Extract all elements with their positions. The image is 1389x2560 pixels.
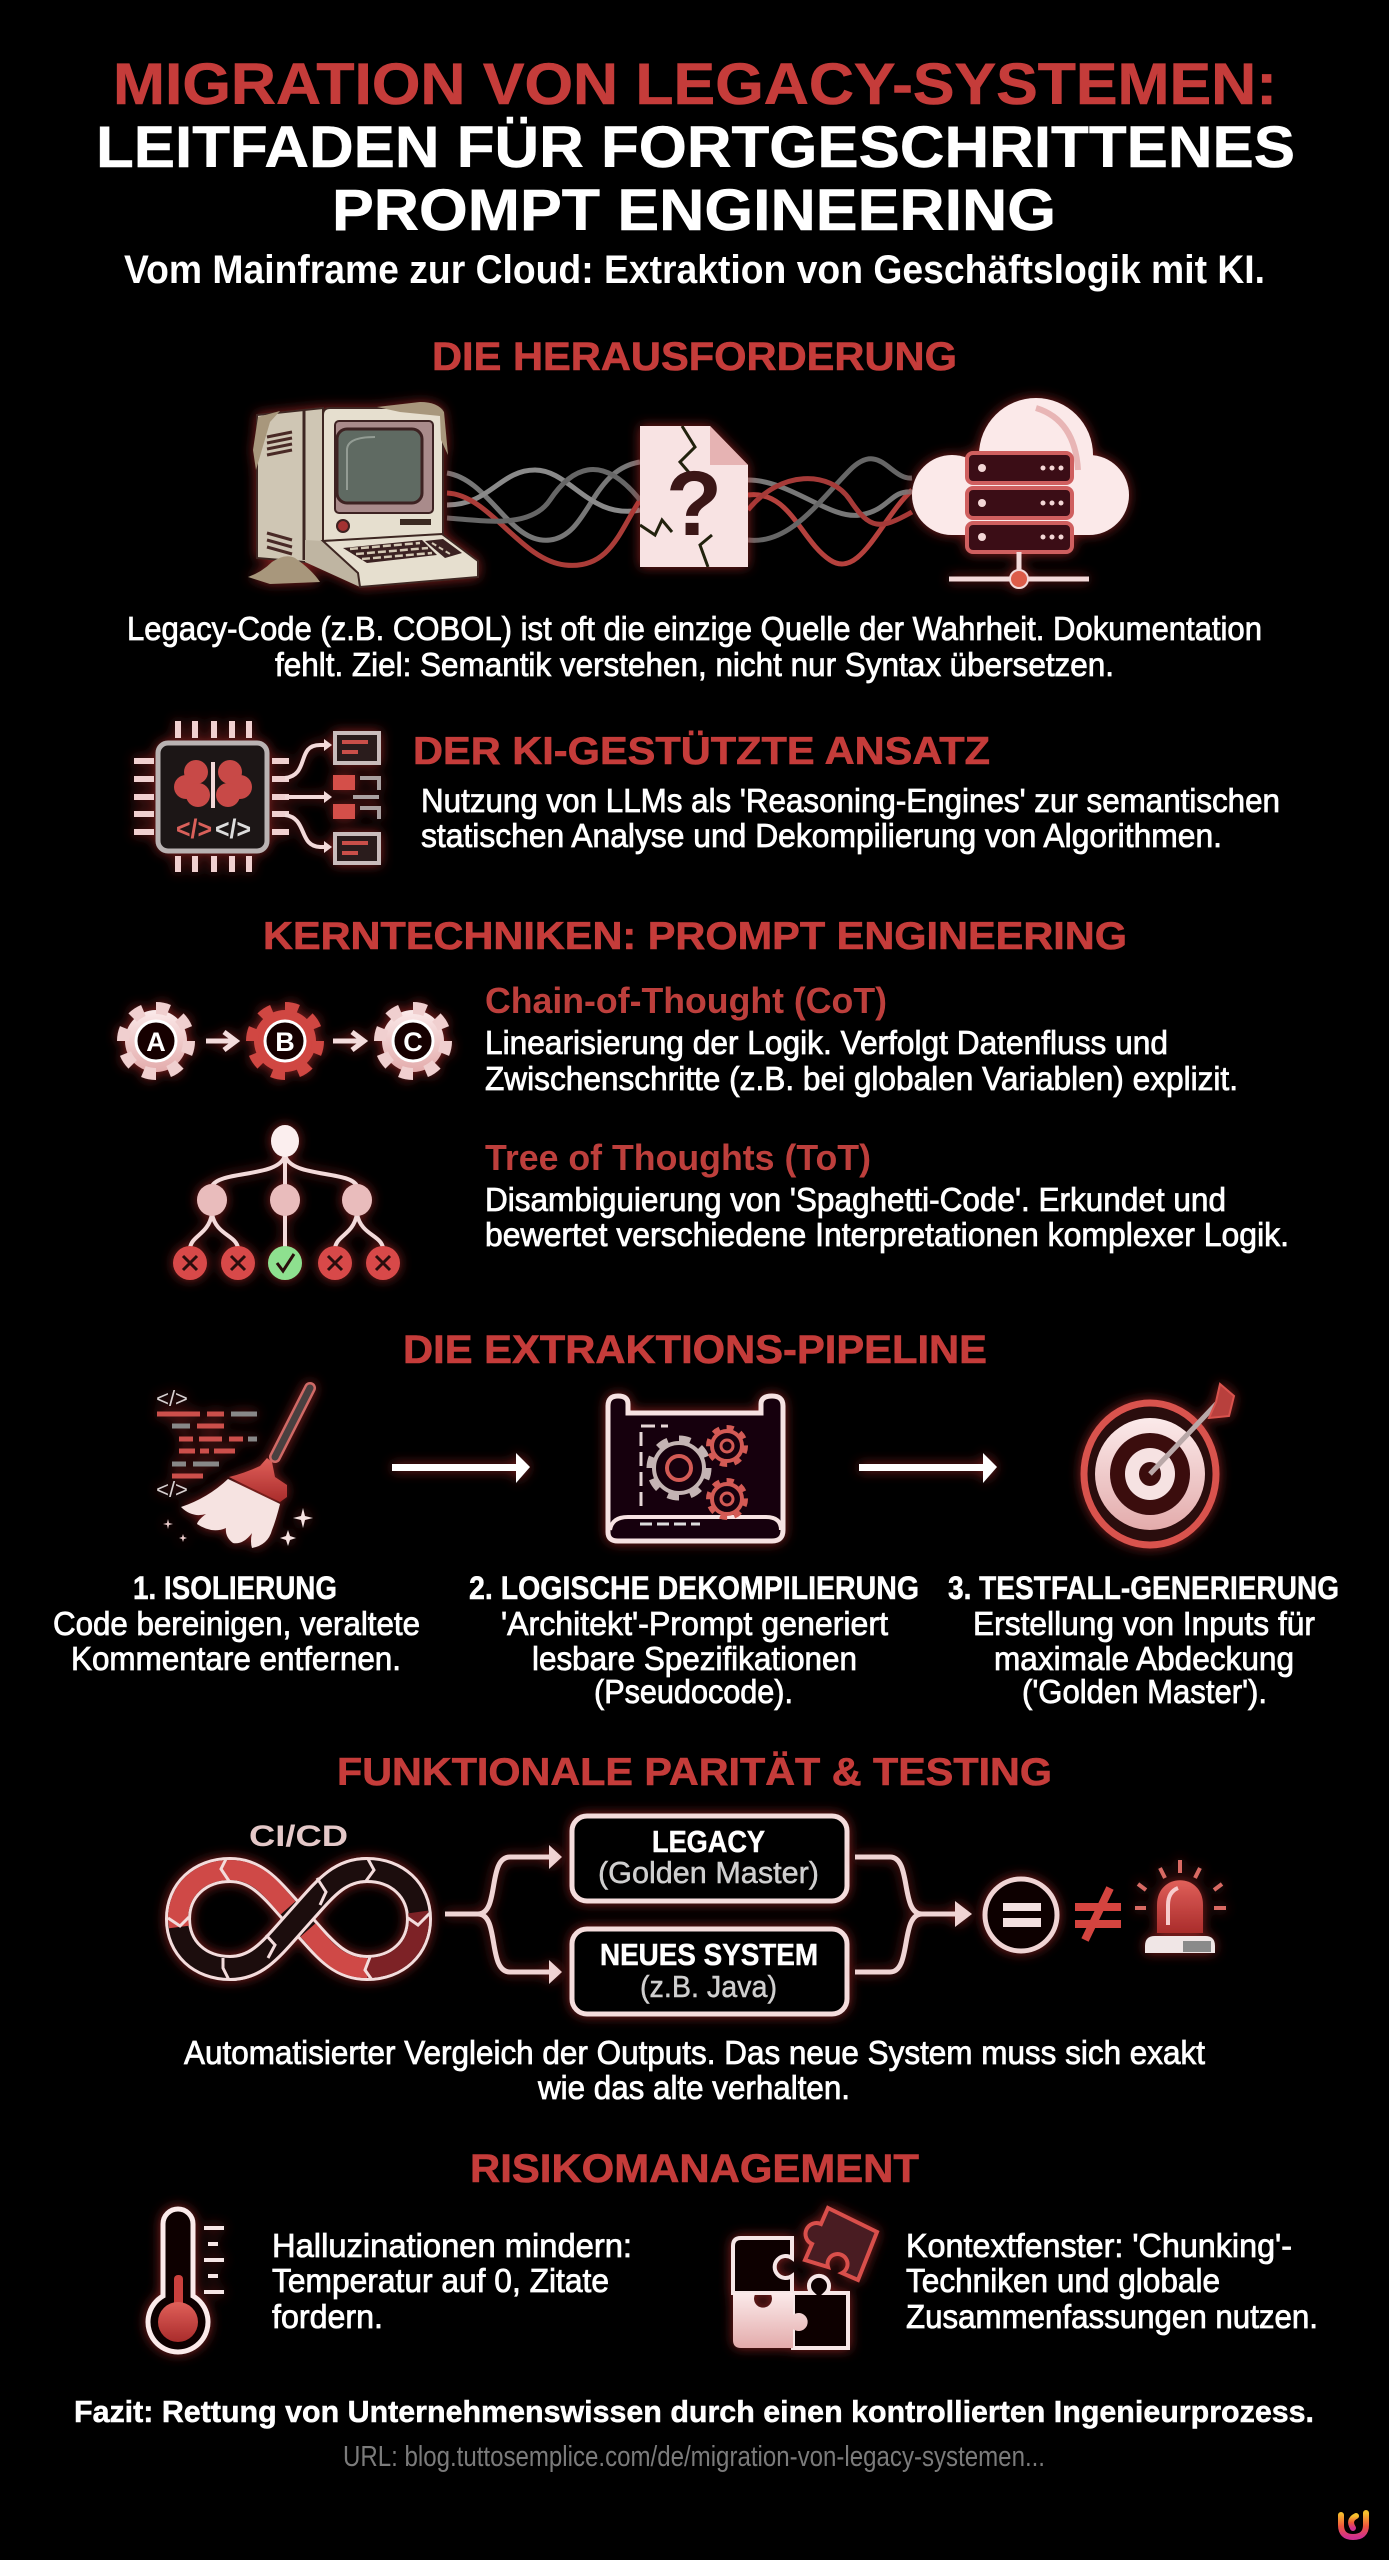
icon: broken document: ?	[666, 453, 722, 555]
text: source url: URL: blog.tuttosemplice.com/de/migration-von-legacy-systemen...	[343, 2441, 1045, 2473]
text: context window: Zusammenfassungen nutzen.	[906, 2298, 1318, 2335]
icon: cloud with servers	[912, 398, 1129, 588]
icon: old computer	[248, 402, 478, 587]
icon: decision tree	[173, 1125, 400, 1280]
heading: die herausforderung: DIE HERAUSFORDERUNG	[432, 335, 957, 379]
text: tree of thoughts	[485, 1137, 1289, 1253]
text: challenge description: Legacy-Code (z.B. COBOL) ist oft die einzige Quelle der Wahrheit. Dokumentation	[127, 610, 1262, 647]
title	[96, 52, 1295, 243]
text: hallucinations	[272, 2227, 632, 2335]
text: context window: Kontextfenster: 'Chunking'-	[906, 2227, 1292, 2264]
icon: infinity loop	[168, 1859, 430, 1980]
icon: broom cleaning code: </>	[156, 1386, 188, 1411]
text: challenge description: fehlt. Ziel: Semantik verstehen, nicht nur Syntax übersetzen.	[275, 646, 1114, 683]
label: ci/cd: CI/CD	[249, 1820, 348, 1853]
text: context window: Techniken und globale	[906, 2262, 1220, 2299]
icon: logo	[1341, 2513, 1366, 2537]
title: PROMPT ENGINEERING	[332, 178, 1056, 243]
arrows: merge to comparator	[855, 1857, 972, 1972]
text: chain of thought: Linearisierung der Logik. Verfolgt Datenfluss und	[485, 1024, 1168, 1061]
icon: not equal	[1075, 1888, 1121, 1940]
gear B: B	[275, 1027, 295, 1057]
gear A	[123, 1008, 189, 1074]
text: context window	[906, 2227, 1318, 2335]
icon: broom cleaning code: </>	[156, 1477, 188, 1502]
icon: AI chip with outputs: </>	[215, 814, 251, 844]
gear A: A	[146, 1027, 166, 1057]
box: neues system: (z.B. Java)	[640, 1969, 777, 2004]
title: LEITFADEN FÜR FORTGESCHRITTENES	[96, 115, 1295, 180]
arrow: step 2 to 3	[859, 1453, 997, 1483]
icon: tangled wires	[447, 459, 912, 565]
text: chain of thought: Chain-of-Thought (CoT)	[485, 980, 887, 1021]
heading: ki-gestuetzter ansatz: DER KI-GESTÜTZTE ANSATZ	[413, 730, 990, 773]
text: challenge description	[127, 610, 1262, 683]
icon: puzzle pieces	[733, 2208, 877, 2348]
subtitle: Vom Mainframe zur Cloud: Extraktion von Geschäftslogik mit KI.	[124, 248, 1265, 292]
text: hallucinations: Temperatur auf 0, Zitate	[272, 2262, 609, 2299]
gear B	[252, 1008, 318, 1074]
text: step 3 testfall-generierung: maximale Abdeckung	[994, 1640, 1294, 1677]
text: chain of thought	[485, 980, 1238, 1097]
text: parity description: wie das alte verhalten.	[537, 2069, 850, 2106]
icon: AI chip with outputs: </>	[176, 814, 212, 844]
text: step 2 logische dekompilierung: 2. LOGISCHE DEKOMPILIERUNG	[469, 1570, 919, 1606]
icon: gear chain A B C	[123, 1008, 446, 1074]
text: step 2 logische dekompilierung	[469, 1570, 919, 1710]
text: parity description: Automatisierter Vergleich der Outputs. Das neue System muss sich exakt	[184, 2034, 1205, 2071]
heading: funktionale paritaet: FUNKTIONALE PARITÄT & TESTING	[337, 1751, 1052, 1794]
text: step 1 isolierung: Kommentare entfernen.	[71, 1640, 401, 1677]
box: neues system: NEUES SYSTEM	[600, 1937, 818, 1972]
text: step 1 isolierung: Code bereinigen, veraltete	[53, 1605, 420, 1642]
text: step 3 testfall-generierung	[948, 1570, 1339, 1710]
icon: thermometer	[148, 2209, 224, 2352]
box: neues system	[572, 1929, 847, 2014]
gear C: C	[403, 1027, 423, 1057]
heading: extraktions-pipeline: DIE EXTRAKTIONS-PIPELINE	[403, 1328, 987, 1372]
text: chain of thought: Zwischenschritte (z.B. bei globalen Variablen) explizit.	[485, 1060, 1238, 1097]
text: step 2 logische dekompilierung: lesbare Spezifikationen	[532, 1640, 857, 1677]
heading: kerntechniken: KERNTECHNIKEN: PROMPT ENGINEERING	[263, 915, 1127, 958]
gear C	[380, 1008, 446, 1074]
icon: blueprint with gears	[608, 1396, 783, 1541]
text: tree of thoughts: Disambiguierung von 'Spaghetti-Code'. Erkundet und	[485, 1181, 1226, 1218]
arrow: step 1 to 2	[392, 1453, 530, 1483]
box: legacy: (Golden Master)	[598, 1855, 819, 1890]
icon: AI chip with outputs	[134, 721, 379, 872]
icon: broom cleaning code	[156, 1386, 313, 1548]
box: legacy: LEGACY	[652, 1824, 765, 1859]
text: step 2 logische dekompilierung: (Pseudocode).	[594, 1673, 793, 1710]
text: parity description	[184, 2034, 1205, 2106]
text: ai approach description: Nutzung von LLMs als 'Reasoning-Engines' zur semantischen	[421, 782, 1280, 819]
text: hallucinations: Halluzinationen mindern:	[272, 2227, 632, 2264]
text: ai approach description: statischen Analyse und Dekompilierung von Algorithmen.	[421, 817, 1222, 854]
text: step 1 isolierung	[53, 1570, 420, 1677]
box: legacy	[572, 1816, 847, 1901]
title: MIGRATION VON LEGACY-SYSTEMEN:	[113, 52, 1277, 117]
text: tree of thoughts: Tree of Thoughts (ToT)	[485, 1137, 871, 1178]
text: step 3 testfall-generierung: 3. TESTFALL-GENERIERUNG	[948, 1570, 1339, 1606]
icon: target with arrow	[1084, 1384, 1234, 1545]
text: step 3 testfall-generierung: ('Golden Master').	[1022, 1673, 1267, 1710]
icon: equals in circle	[985, 1879, 1057, 1951]
text: hallucinations: fordern.	[272, 2298, 383, 2335]
text: step 3 testfall-generierung: Erstellung von Inputs für	[973, 1605, 1315, 1642]
text: step 1 isolierung: 1. ISOLIERUNG	[133, 1570, 337, 1606]
text: ai approach description	[421, 782, 1280, 854]
icon: alarm siren	[1135, 1860, 1226, 1953]
text: conclusion: Fazit: Rettung von Unternehmenswissen durch einen kontrollierten Ingenieurprozess.	[74, 2394, 1314, 2429]
text: tree of thoughts: bewertet verschiedene Interpretationen komplexer Logik.	[485, 1216, 1289, 1253]
icon: broken document	[640, 426, 748, 567]
text: step 2 logische dekompilierung: 'Architekt'-Prompt generiert	[501, 1605, 888, 1642]
heading: risikomanagement: RISIKOMANAGEMENT	[470, 2147, 919, 2191]
arrows: split to boxes	[445, 1845, 562, 1984]
